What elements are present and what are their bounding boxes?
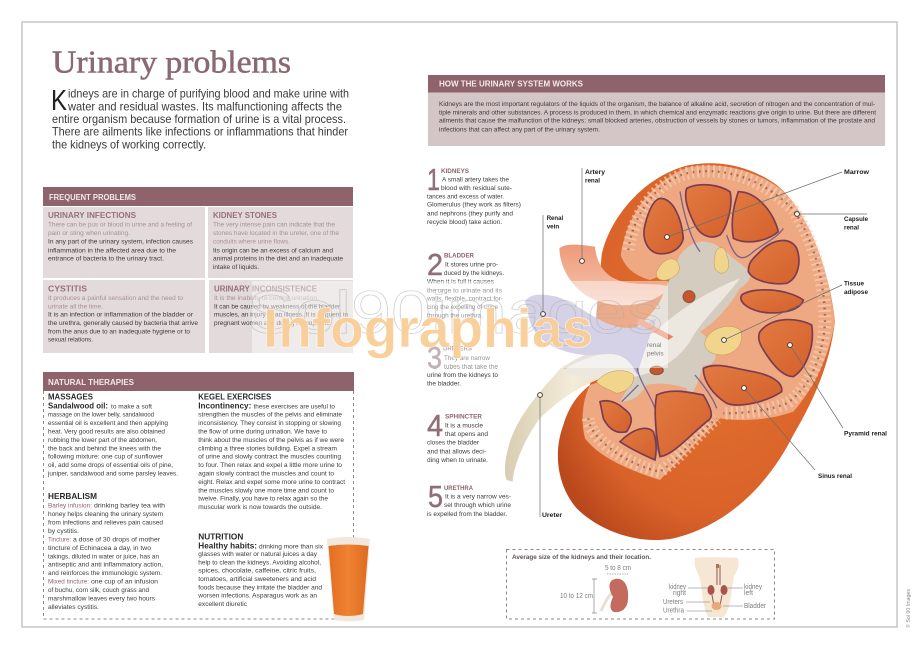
step 2: bladder: walls, flexible, contract for-	[426, 296, 503, 302]
step 3: ureters: 3	[427, 340, 442, 375]
illustration: kidney cross-section	[505, 163, 835, 540]
card: kidney stones: Its origin can be an excess of calcium and	[213, 247, 333, 254]
text: nutrition: tomatoes, artificial sweeteners and acid	[198, 576, 316, 583]
text: kegel exercises: KEGEL EXERCISES	[198, 392, 272, 402]
text: herbalism: Tincture:	[48, 537, 71, 544]
intro text: K	[51, 85, 68, 117]
renal pelvis label	[647, 342, 664, 358]
title: Urinary problems	[52, 44, 291, 80]
icon: torso with urinary system	[695, 557, 739, 617]
text: massages	[47, 392, 178, 478]
card: urinary infections: In any part of the urinary system, infection causes	[48, 239, 194, 246]
panel: how the urinary system works	[428, 75, 885, 146]
vessel openings	[637, 291, 695, 375]
ureter	[505, 365, 640, 482]
step 5: urethra: It is a very narrow ves-	[445, 494, 511, 501]
label: ureter	[538, 393, 562, 519]
label: tissue adipose: adipose	[844, 289, 868, 296]
outer kidney surface	[558, 163, 835, 540]
text: system description	[439, 101, 876, 133]
renal vein	[525, 295, 657, 375]
step 4: sphincter: SPHINCTER	[445, 414, 482, 421]
card: urinary inconsistence: muscles, an injury or an illness. It is frequent in	[214, 312, 348, 319]
text: massages: heat. Very good results are also obtained	[48, 428, 165, 435]
label: artery renal	[580, 168, 605, 263]
cut cortex	[583, 165, 835, 480]
text: system description: tiple minerals and other substances. A process is produced in them, in which chemical and enzymatic reactions give origin to urine. But there are different	[439, 109, 876, 116]
card: kidney stones: KIDNEY STONES	[213, 211, 278, 220]
step 1: kidneys: Glomerulus (they work as filters)	[427, 202, 521, 209]
text: herbalism: drinking barley tea with	[94, 503, 165, 510]
step 2: bladder: duced by the kidneys.	[444, 270, 504, 277]
panel: frequent problems	[43, 187, 353, 353]
location labels: right	[673, 590, 686, 597]
card: urinary infections: URINARY INFECTIONS	[48, 211, 137, 220]
step 4: sphincter: It is a muscle	[445, 422, 483, 429]
text: herbalism: alleviates cystitis.	[48, 604, 99, 611]
step 2: bladder: cing the expelling of urine	[427, 304, 498, 311]
text: kegel exercises	[198, 392, 345, 511]
text: massages: Sandalwood oil:	[48, 400, 108, 410]
step 1: kidneys: recycle blood) take action.	[427, 219, 502, 226]
step 1: kidneys: A small artery takes the	[442, 177, 509, 184]
copyright: © Sol 90 Images	[905, 589, 912, 628]
text: massages: MASSAGES	[48, 392, 93, 402]
dashed panel outline	[44, 391, 354, 619]
step 2: bladder: 2	[427, 247, 443, 282]
text: system description: infections that can affect any part of the urinary system.	[439, 126, 600, 133]
text: nutrition: Healthy habits:	[198, 540, 257, 550]
text: system description: ailments that cause the malfunction of the kidneys: small blocked arteries, obstruction of vessels by stones or tumors, inflammation of the prostate and	[439, 118, 875, 124]
text: massages: the back and behind the knees with the	[48, 445, 161, 452]
text: kegel exercises: again slowly contract the muscles and count to	[198, 471, 334, 478]
card: cystitis: from the anus due to an inadequate hygiene or to	[48, 328, 190, 335]
text: herbalism: a dose of 30 drops of mother	[73, 537, 161, 544]
location labels: left	[744, 590, 753, 597]
label: renal vein: vein	[547, 224, 559, 231]
text: herbalism: one cup of an infusion	[91, 579, 158, 586]
text: kegel exercises: think about the muscles of the pelvis as if we were	[198, 437, 344, 444]
heading: how the urinary system works: HOW THE URINARY SYSTEM WORKS	[439, 80, 584, 88]
adipose tissue clusters	[597, 247, 742, 393]
card: cystitis: the urethra, generally caused by bacteria that arrive	[48, 320, 198, 327]
text: nutrition: glasses with water or natural juices a day	[198, 551, 318, 558]
card: urinary inconsistence: It can be caused by weakness of the bladder	[214, 303, 341, 310]
step 5: urethra: is expelled from the bladder.	[427, 511, 507, 518]
label: artery renal: renal	[585, 178, 600, 185]
step 3: ureters	[427, 340, 498, 387]
renal pelvis highlight	[563, 278, 740, 379]
pyramids	[600, 185, 812, 460]
card: urinary inconsistence: URINARY INCONSISTENCE	[214, 285, 318, 294]
card: cystitis	[43, 280, 205, 353]
text: massages: rubbing the lower part of the abdomen,	[48, 437, 157, 444]
label: pyramid renal: Pyramid renal	[844, 431, 887, 438]
step 2: bladder: When it is full it causes	[427, 279, 495, 286]
kidney labels	[538, 168, 887, 519]
text: kegel exercises: climbing a three stories building. Expel a stream	[198, 445, 337, 452]
step 5: urethra: sel through which urine	[444, 502, 511, 509]
text: kegel exercises: muscular work is now towards the outside.	[198, 504, 322, 511]
text: herbalism: Barley infusion:	[48, 503, 92, 510]
text: massages: juniper, sandalwood and some parsley leaves.	[47, 471, 178, 478]
intro text: entire organism because formation of urine is a vital process.	[52, 112, 346, 126]
height measure: 10 to 12 cm	[560, 593, 593, 600]
label: capsule renal	[795, 212, 868, 232]
step 4: sphincter: and that allows deci-	[427, 448, 486, 455]
artery renal	[559, 245, 668, 305]
card: cystitis: It is an infection or inflammation of the bladder or	[48, 312, 194, 319]
renal sinus	[563, 242, 750, 402]
text: kegel exercises: strengthen the muscles of the pelvis and eliminate	[198, 412, 342, 419]
text: herbalism: from infections and relieves pain caused	[48, 519, 163, 526]
label: renal vein	[541, 215, 563, 316]
intro text: There are ailments like infections or inflammations that hinder	[52, 124, 348, 138]
text: kegel exercises: inconsistency. They consist in stopping or slowing	[198, 420, 341, 427]
label: ureter: Ureter	[542, 512, 562, 519]
heading: frequent problems: FREQUENT PROBLEMS	[49, 193, 137, 202]
panel: natural therapies	[43, 372, 370, 622]
text: kegel exercises: to four. Then relax and expel a little more urine to	[198, 462, 342, 469]
text: herbalism: honey helps cleaning the urinary system	[48, 511, 163, 518]
card: cystitis: It produces a painful sensation and the need to	[48, 295, 183, 302]
label: sinus renal	[742, 386, 852, 480]
heading: natural therapies	[43, 372, 354, 391]
heading: frequent problems	[43, 187, 353, 206]
step 5: urethra	[427, 479, 511, 518]
location labels: Ureters	[663, 599, 683, 606]
intro text: the kidneys of working correctly.	[52, 137, 206, 151]
text: herbalism: of buchu, corn silk, couch grass and	[48, 587, 149, 594]
step 5: urethra: URETHRA	[444, 485, 473, 492]
cortex stripes	[588, 171, 825, 472]
text: kegel exercises: these exercises are useful to	[254, 403, 335, 410]
text: system description: Kidneys are the most important regulators of the liquids of the organism, the balance of alkaline acid, secretion of nitrogen and the concentration of mul-	[439, 101, 875, 108]
intro text: idneys are in charge of purifying blood and make urine with	[68, 87, 349, 101]
label: sinus renal: Sinus renal	[818, 473, 852, 480]
label: pyramid renal	[788, 343, 887, 438]
heading: Average size of the kidneys and their location.	[512, 554, 651, 561]
location labels: kidney	[744, 584, 762, 591]
cortex dots	[588, 171, 825, 472]
text: herbalism: by cystitis.	[48, 528, 79, 535]
step 3: ureters: the bladder.	[427, 380, 461, 387]
text: nutrition: excellent diuretic	[198, 601, 248, 608]
text: kegel exercises: of urine and slowly contract the muscles counting	[198, 454, 341, 461]
text: herbalism: marshmallow leaves every two hours	[48, 595, 156, 602]
step 1: kidneys: 1	[427, 162, 440, 197]
card: kidney stones: animal proteins in the diet and an inadequate	[213, 256, 343, 263]
renal pelvis label: renal	[647, 342, 662, 349]
text: nutrition: foods because they irritate the bladder and	[198, 584, 322, 591]
card: kidney stones: intake of liquids.	[213, 264, 259, 271]
location labels: kidney	[669, 584, 686, 591]
card: cystitis: CYSTITIS	[48, 285, 88, 294]
step 4: sphincter: that opens and	[445, 431, 488, 438]
label: tissue adipose	[722, 281, 868, 342]
text: herbalism: tincture of Echinacea a day, in two	[48, 545, 151, 552]
text: nutrition: worsen infections. Asparagus work as an	[197, 593, 317, 600]
watermark: Infographias	[263, 297, 593, 359]
vein branches	[622, 192, 783, 457]
renal pelvis label: pelvis	[647, 350, 664, 358]
step 3: ureters: They are narrow	[444, 355, 490, 362]
text: nutrition: NUTRITION	[198, 532, 243, 542]
label: artery renal: Artery	[585, 169, 605, 176]
label: capsule renal: renal	[844, 225, 859, 232]
label: renal vein: Renal	[547, 215, 563, 222]
text: nutrition	[197, 532, 324, 608]
label: marrow: Marrow	[844, 169, 870, 176]
step 5: urethra: 5	[428, 479, 443, 514]
card: cystitis: urinate all the time.	[48, 303, 103, 310]
text: massages: following mixture: one cup of sunflower	[48, 454, 164, 461]
text: kegel exercises: eight. Relax and expel some more urine to contract	[198, 479, 345, 486]
location labels: Urethra	[663, 608, 684, 615]
card: kidney stones: stones have located in the ureter, one of the	[213, 230, 339, 237]
card: kidney stones	[208, 207, 353, 278]
text: herbalism: Mixed tincture:	[48, 579, 89, 586]
step 2: bladder: It stores urine pro-	[445, 261, 498, 268]
card: urinary infections: entrance of bacteria to the urinary tract.	[48, 256, 164, 263]
step 3: ureters: URETERS	[443, 346, 472, 352]
text: herbalism: antiseptic and anti inflammatory action,	[48, 562, 163, 569]
text: herbalism: HERBALISM	[48, 491, 97, 501]
heading: how the urinary system works	[428, 75, 885, 92]
step 1: kidneys: and nephrons (they purify and	[427, 210, 513, 217]
label: capsule renal: Capsule	[844, 216, 868, 223]
label: tissue adipose: Tissue	[844, 281, 864, 288]
watermark	[247, 279, 663, 359]
location labels: Bladder	[744, 603, 767, 610]
card: urinary infections: inflammation in the affected area due to the	[48, 247, 176, 254]
intro text: water and residual wastes. Its malfunctioning affects the	[67, 99, 342, 113]
step 2: bladder	[426, 247, 504, 319]
text: massages: massage on the lower belly, sandalwood	[48, 412, 154, 419]
card: urinary inconsistence: pregnant women and during menopause	[214, 320, 330, 327]
step 4: sphincter: ding when to urinate.	[427, 457, 488, 464]
location labels	[663, 584, 767, 615]
text: kegel exercises: the muscles slowly one more time and count to	[198, 487, 334, 494]
step 2: bladder: through the urethra.	[427, 312, 483, 319]
icon: glass of juice	[327, 537, 370, 622]
step 2: bladder: the urge to urinate and its	[427, 287, 503, 294]
step 2: bladder: BLADDER	[444, 253, 474, 260]
icon: kidney	[601, 579, 628, 612]
step 1: kidneys	[427, 162, 521, 226]
text: nutrition: spices, chocolate, caffeine, citric fruits,	[198, 568, 316, 575]
panel body	[428, 92, 885, 146]
card: urinary infections	[43, 207, 205, 278]
card: urinary inconsistence	[209, 280, 353, 353]
panel: kidney size and location	[506, 550, 774, 619]
text: kegel exercises: Incontinency:	[198, 400, 251, 410]
step 1: kidneys: KIDNEYS	[441, 168, 470, 175]
text: herbalism: and reinforces the immunologic system.	[48, 570, 162, 577]
card: urinary infections: There can be pus or blood in urine and a feeling of	[48, 222, 192, 229]
height measure	[560, 579, 597, 613]
label: marrow	[665, 169, 870, 239]
text: nutrition: drinking more than six	[259, 543, 324, 550]
step 3: ureters: urine from the kidneys to	[427, 372, 498, 379]
text: massages: to make a soft	[111, 403, 152, 410]
card: urinary infections: pain or sting when urinating.	[48, 230, 130, 237]
text: nutrition: help to clean the kidneys. Avoiding alcohol,	[198, 559, 321, 566]
intro text	[51, 85, 349, 151]
step 3: ureters: tubes that take the	[444, 364, 498, 371]
step 1: kidneys: tances and excess of water.	[427, 193, 504, 200]
watermark: Sol90images	[247, 279, 663, 346]
text: massages: oil, add some drops of essential oils of pine,	[48, 462, 173, 469]
text: massages: essential oil is excellent and then applying	[48, 420, 168, 427]
card: urinary inconsistence: It is the inability to control urination.	[214, 295, 319, 302]
step 4: sphincter: closes the bladder	[427, 440, 480, 447]
step 4: sphincter	[427, 408, 488, 464]
watermark band	[252, 281, 668, 368]
text: herbalism: takings, diluted in water or juice, has an	[48, 553, 159, 560]
text: kegel exercises: the flow of urine during urination. We have to	[198, 428, 327, 435]
card: kidney stones: The very intense pain can indicate that the	[213, 222, 335, 229]
text: herbalism	[48, 491, 165, 611]
card: cystitis: sexual relations.	[48, 337, 93, 344]
heading: natural therapies: NATURAL THERAPIES	[48, 378, 135, 387]
width measure: 5 to 8 cm	[605, 565, 631, 572]
card: kidney stones: conduits where urine flows.	[213, 239, 290, 246]
step 1: kidneys: blood with residual sute-	[441, 185, 512, 192]
text: kegel exercises: twelve. Finally, you have to relax again so the	[198, 496, 328, 503]
step 4: sphincter: 4	[427, 408, 443, 443]
dashed outline	[506, 550, 774, 619]
